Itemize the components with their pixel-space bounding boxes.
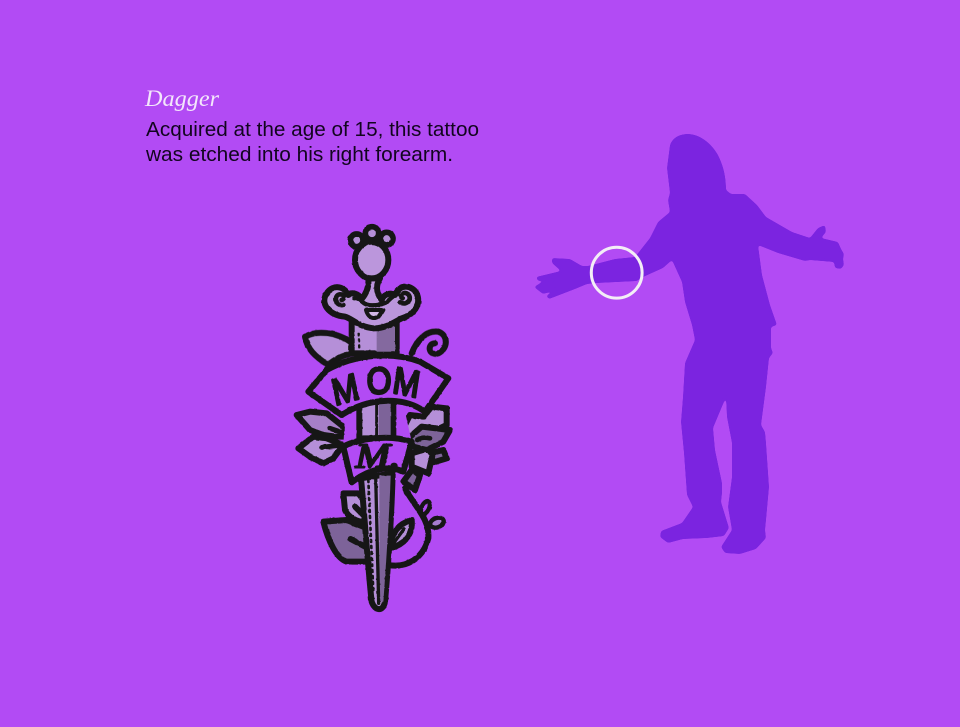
banner text: MOM: MOM (328, 360, 422, 414)
text block: description: Acquired at the age of 15, this tattoo (146, 119, 479, 141)
illustration: dagger tattoo (297, 227, 450, 609)
leaf: small right (390, 520, 412, 548)
handle (352, 322, 397, 353)
pommel ball (355, 242, 388, 278)
heading: Dagger: Dagger (144, 86, 220, 111)
band behind blade (343, 405, 412, 447)
banner: lower (343, 438, 412, 482)
leaf: right light lower (412, 448, 432, 473)
leaf: upper left (305, 333, 353, 365)
callout: forearm highlight ring (591, 247, 642, 298)
banner text: M.: M. (354, 438, 400, 476)
pommel petals (350, 227, 393, 247)
text block: description (145, 119, 479, 166)
blade (361, 473, 393, 609)
leaf: right light petal (403, 407, 447, 442)
bud: lower (429, 516, 445, 529)
leaf: small dark (430, 450, 447, 462)
icon: body silhouette (534, 134, 844, 554)
vine: lower right (388, 488, 428, 566)
leaf: right dark (408, 427, 450, 450)
leaf: small lower left (343, 493, 367, 522)
bud: upper (419, 500, 432, 516)
text block: description: was etched into his right forearm. (145, 144, 453, 166)
vine: upper right spiral (412, 331, 446, 354)
leaf: left upper (297, 412, 352, 437)
blade: midsection (359, 398, 393, 438)
leaf: large dark (323, 520, 369, 562)
crossguard (324, 278, 418, 328)
lower foliage and vine (297, 398, 450, 609)
banner: MOM (308, 355, 448, 415)
leaf: left lower (298, 437, 343, 463)
leaf: right dark piece bottom (403, 470, 420, 490)
